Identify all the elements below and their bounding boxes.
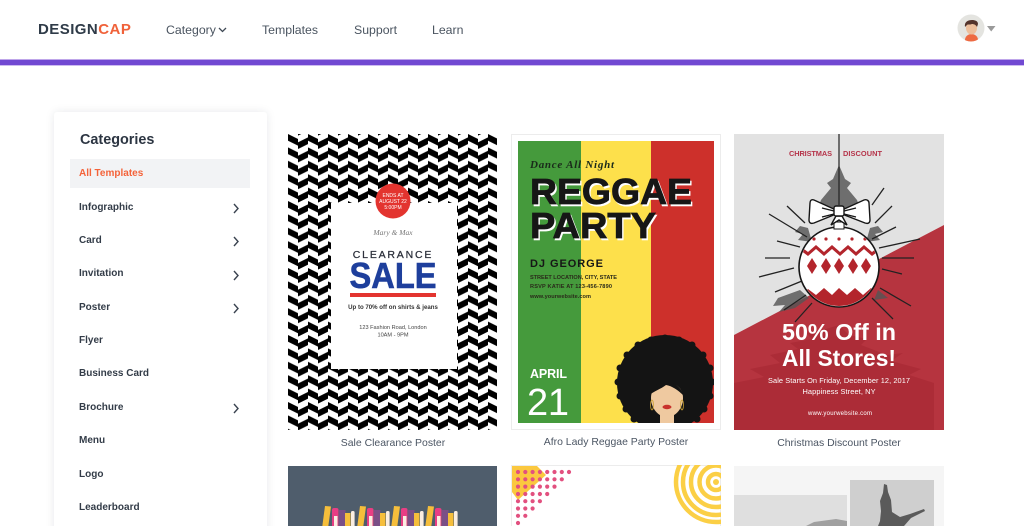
poster copy: reggae party: RSVP KATIE AT 123-456-7890	[530, 284, 612, 290]
badge: ends at	[376, 184, 410, 218]
illustration: bow	[809, 200, 870, 225]
category: poster: Poster	[79, 302, 110, 313]
poster: books on slate	[288, 466, 497, 526]
category: invitation: Invitation	[79, 268, 123, 279]
category: flyer: Flyer	[79, 335, 103, 346]
poster copy: reggae party: PARTY	[530, 205, 656, 246]
poster copy: reggae party: REGGAE	[532, 173, 694, 214]
poster copy: clearance sale: 123 Fashion Road, London	[359, 325, 427, 331]
poster copy: reggae party: REGGAE	[530, 171, 692, 212]
nav item: category: Category	[166, 23, 216, 37]
poster: afro lady reggae party	[511, 134, 721, 430]
category: menu: Menu	[79, 435, 105, 446]
icon: arrow poster	[234, 304, 239, 314]
category: all templates: All Templates	[79, 168, 143, 179]
caption: sale clearance poster: Sale Clearance Poster	[341, 438, 445, 449]
photo: posing dancer	[850, 480, 934, 526]
illustration: row of books	[322, 506, 458, 526]
poster copy: reggae party	[527, 159, 694, 424]
nav item: learn: Learn	[432, 23, 463, 37]
poster copy: christmas discount: 50% Off in	[782, 319, 896, 345]
poster copy: christmas discount: Happiness Street, NY	[802, 387, 876, 396]
illustration: ornament	[799, 222, 880, 307]
category: card: Card	[79, 235, 102, 246]
poster copy: christmas discount: DISCOUNT	[843, 149, 882, 158]
poster: christmas discount	[734, 134, 944, 430]
poster copy: reggae party: APRIL	[530, 367, 567, 381]
illustration: afro lady	[614, 334, 716, 431]
icon: arrow infographic	[234, 204, 239, 214]
poster copy: christmas discount: All Stores!	[782, 345, 896, 371]
purple header divider	[0, 59, 1024, 66]
icon: user avatar	[958, 14, 984, 42]
top navigation bar	[39, 14, 996, 42]
poster copy: clearance sale	[348, 228, 438, 338]
concentric yellow circles	[676, 442, 756, 522]
poster copy: reggae party: Dance All Night	[529, 159, 615, 171]
poster: dots and circles	[511, 465, 721, 526]
poster copy: christmas discount: www.yourwebsite.com	[807, 411, 872, 417]
poster copy: reggae party: PARTY	[532, 207, 658, 248]
heading: categories: Categories	[80, 132, 154, 148]
poster copy: christmas discount	[768, 149, 910, 417]
poster copy: christmas discount: Sale Starts On Friday, December 12, 2017	[768, 376, 910, 385]
category: infographic: Infographic	[79, 202, 133, 213]
caption: afro lady reggae party poster: Afro Lady Reggae Party Poster	[544, 437, 688, 448]
panel: categories sidebar	[54, 112, 267, 526]
dot triangle	[516, 470, 571, 525]
poster copy: clearance sale: CLEARANCE	[353, 249, 433, 261]
nav item: support: Support	[354, 23, 397, 37]
poster copy: reggae party: STREET LOCATION, CITY, STATE	[530, 275, 617, 281]
caption: christmas discount poster: Christmas Discount Poster	[777, 438, 901, 449]
poster copy: christmas discount: CHRISTMAS	[789, 149, 832, 158]
poster: sale clearance	[288, 134, 497, 430]
poster copy: reggae party: DJ GEORGE	[530, 258, 603, 270]
photo: reclining dancer	[734, 495, 847, 526]
icon: arrow invitation	[234, 270, 239, 280]
badge: ends at: 5:00PM	[384, 205, 402, 211]
badge: ends at: ENDS AT	[382, 193, 404, 199]
icon: category dropdown chevron	[218, 28, 226, 32]
hanging string	[838, 134, 840, 205]
poster copy: reggae party: www.yourwebsite.com	[529, 294, 591, 300]
icon: arrow brochure	[234, 404, 239, 414]
poster copy: clearance sale: SALE	[350, 255, 436, 296]
poster copy: clearance sale: Mary & Max	[372, 228, 413, 237]
icon: avatar dropdown caret	[987, 26, 996, 32]
background tree silhouette	[734, 325, 934, 430]
poster copy: reggae party: 21	[527, 382, 569, 424]
category: business card: Business Card	[79, 368, 149, 379]
category: logo: Logo	[79, 469, 103, 480]
yellow corner polygon	[512, 466, 546, 500]
active row highlight	[70, 159, 250, 188]
poster copy: clearance sale: Up to 70% off on shirts & jeans	[348, 304, 438, 311]
logo: DESIGNCAP	[38, 21, 131, 38]
illustration: gray tree	[773, 165, 888, 312]
category: leaderboard: Leaderboard	[79, 502, 140, 513]
icon: arrow card	[234, 236, 239, 246]
poster: dancer photos	[734, 466, 944, 526]
badge: ends at: AUGUST 22	[379, 199, 407, 205]
nav item: templates: Templates	[262, 23, 318, 37]
sunburst rays	[759, 188, 920, 322]
poster copy: clearance sale: 10AM - 9PM	[377, 332, 409, 338]
category: brochure: Brochure	[79, 402, 123, 413]
